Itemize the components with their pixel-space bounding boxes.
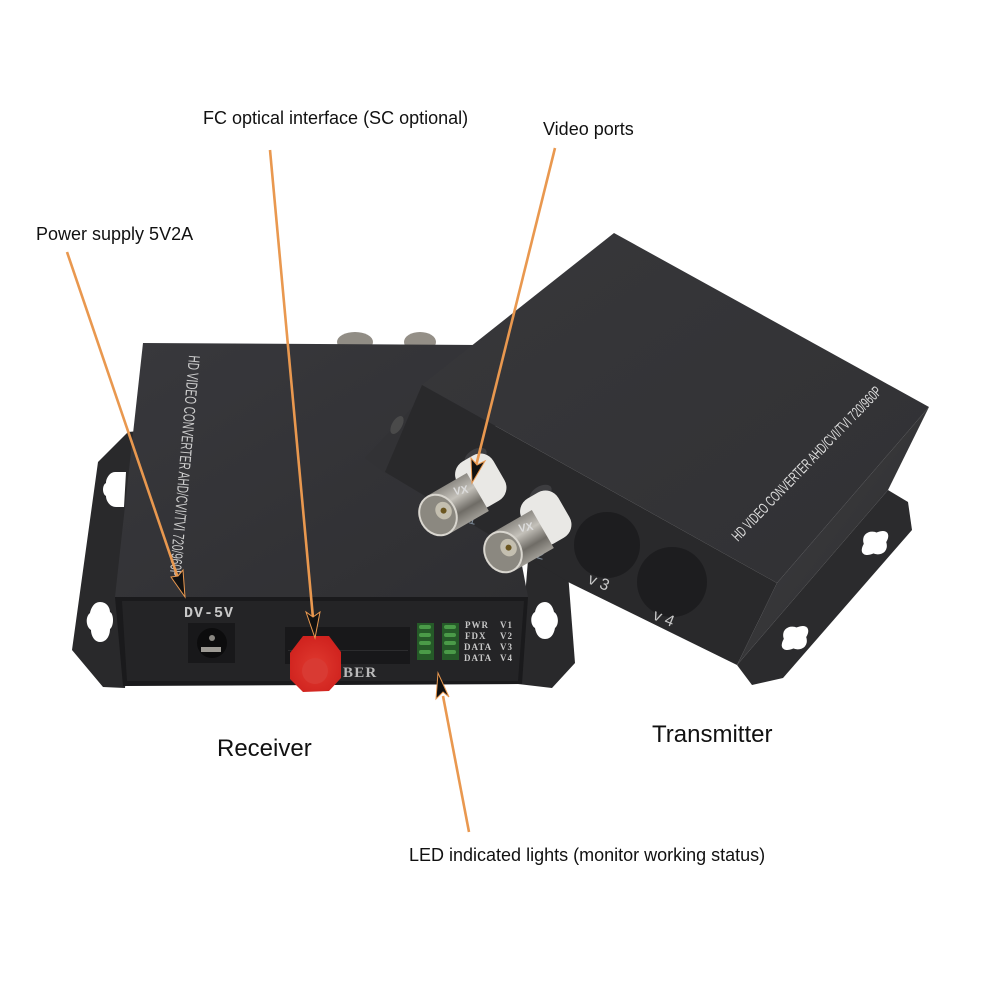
power label on panel: DV-5V: [184, 605, 233, 622]
transmitter back flange: [365, 400, 430, 480]
fiber port recess: [285, 627, 410, 664]
LED indicator lights: [417, 623, 459, 660]
LED labels: PWR: [465, 620, 489, 630]
transmitter top face: [422, 233, 929, 583]
label: FC optical interface: FC optical interface (SC optional): [203, 108, 468, 128]
LED labels: DATA: [464, 653, 492, 663]
label: transmitter: Transmitter: [652, 721, 772, 748]
receiver left mounting flange: [72, 430, 150, 688]
back flange hole shadow: [388, 414, 406, 436]
transmitter right face: [737, 407, 929, 665]
LED labels: [464, 620, 513, 663]
label: receiver: Receiver: [217, 735, 312, 762]
arrow: video ports: [471, 148, 555, 483]
receiver top face: [115, 343, 528, 597]
BNC connector 2: [467, 481, 579, 581]
DC power jack: [188, 623, 235, 663]
arrow: power supply: [67, 252, 185, 597]
transmitter right flange: [737, 490, 912, 685]
label: power supply: Power supply 5V2A: [36, 224, 193, 244]
LED labels: V1: [500, 620, 513, 630]
receiver inner panel: [122, 601, 524, 681]
label: video ports: Video ports: [543, 119, 634, 139]
arrow: FC optical interface: [270, 150, 320, 638]
receiver right mounting flange: [518, 560, 575, 688]
transmitter front face: [385, 385, 777, 665]
LED labels: DATA: [464, 642, 492, 652]
LED labels: V3: [500, 642, 513, 652]
receiver top label: HD VIDEO CONVERTER AHD/CVI/TVI 720/960P: [166, 355, 202, 577]
BNC connector 2: VX: [518, 521, 535, 535]
receiver device: [72, 332, 575, 692]
LED labels: FDX: [465, 631, 486, 641]
port label 1: 1: [467, 511, 478, 528]
port label v4: v 4: [651, 607, 677, 631]
BNC connector 1: [402, 444, 514, 544]
transmitter top label: HD VIDEO CONVERTER AHD/CVI/TVI 720/960P: [729, 383, 885, 545]
red FC dust cap: [290, 636, 341, 692]
LED labels: V4: [500, 653, 513, 663]
label: LED indicated lights: LED indicated lights (monitor working status): [409, 845, 765, 865]
arrow: LED lights: [436, 673, 469, 832]
fiber text on panel: BER: [343, 665, 377, 681]
port label 2: 2: [535, 546, 546, 563]
blanking plug V4: [637, 547, 707, 617]
transmitter device: [365, 233, 929, 685]
rear BNC connectors of receiver: [337, 332, 436, 352]
blanking plug V3: [574, 512, 640, 578]
left flange hole: [87, 602, 113, 642]
port label v3: v 3: [586, 571, 612, 595]
receiver front panel: [115, 597, 528, 686]
right flange lower hole: [778, 622, 812, 654]
right flange upper hole: [858, 527, 892, 559]
right flange hole: [531, 602, 558, 639]
BNC connector 1: VX: [453, 484, 470, 498]
LED labels: V2: [500, 631, 513, 641]
